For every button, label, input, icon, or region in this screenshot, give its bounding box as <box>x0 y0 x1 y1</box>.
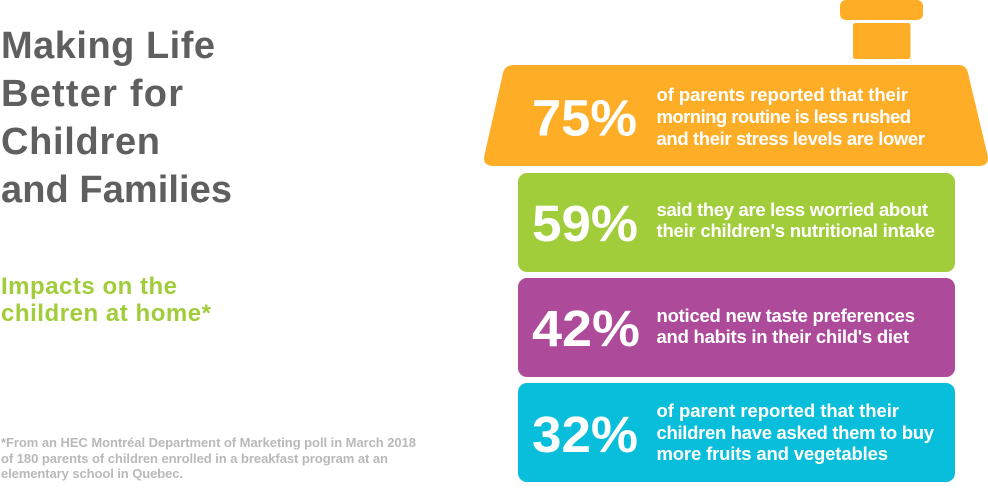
title: Children <box>1 121 160 163</box>
footnote <box>1 435 416 481</box>
panel: green 59%: their children's nutritional intake <box>656 220 935 241</box>
panel: purple 42% <box>518 278 955 377</box>
panel: blue 32%: 32% <box>532 406 638 463</box>
footnote: elementary school in Quebec. <box>1 466 183 481</box>
panel: purple 42%: noticed new taste preferences <box>656 305 915 326</box>
title: and Families <box>1 169 232 211</box>
panel: orange roof 75%: morning routine is less rushed <box>656 106 911 127</box>
title <box>1 25 232 211</box>
icon: chimney cap <box>840 0 923 20</box>
panel: green 59% <box>518 173 955 272</box>
panel: orange roof 75%: and their stress levels are lower <box>656 128 925 149</box>
panel: orange roof 75%: 75% <box>532 90 637 146</box>
panel: purple 42%: and habits in their child's diet <box>656 326 909 347</box>
title: Making Life <box>1 25 215 67</box>
panel: green 59%: said they are less worried about <box>656 199 928 220</box>
panel: orange roof 75%: of parents reported that their <box>656 84 908 105</box>
panel: blue 32%: children have asked them to buy <box>656 422 935 443</box>
icon: chimney stack <box>853 23 910 59</box>
panel: purple 42%: 42% <box>532 300 640 357</box>
subtitle: Impacts on the <box>1 273 177 300</box>
footnote: of 180 parents of children enrolled in a breakfast program at an <box>1 451 388 466</box>
panel: blue 32% <box>518 383 955 482</box>
panel: green 59%: 59% <box>532 195 638 252</box>
subtitle <box>1 273 212 327</box>
title: Better for <box>1 73 183 115</box>
footnote: *From an HEC Montréal Department of Marketing poll in March 2018 <box>1 435 416 450</box>
subtitle: children at home* <box>1 300 212 327</box>
panel: blue 32%: more fruits and vegetables <box>656 443 888 464</box>
panel: orange roof 75% <box>484 65 988 166</box>
panel: blue 32%: of parent reported that their <box>656 400 899 421</box>
